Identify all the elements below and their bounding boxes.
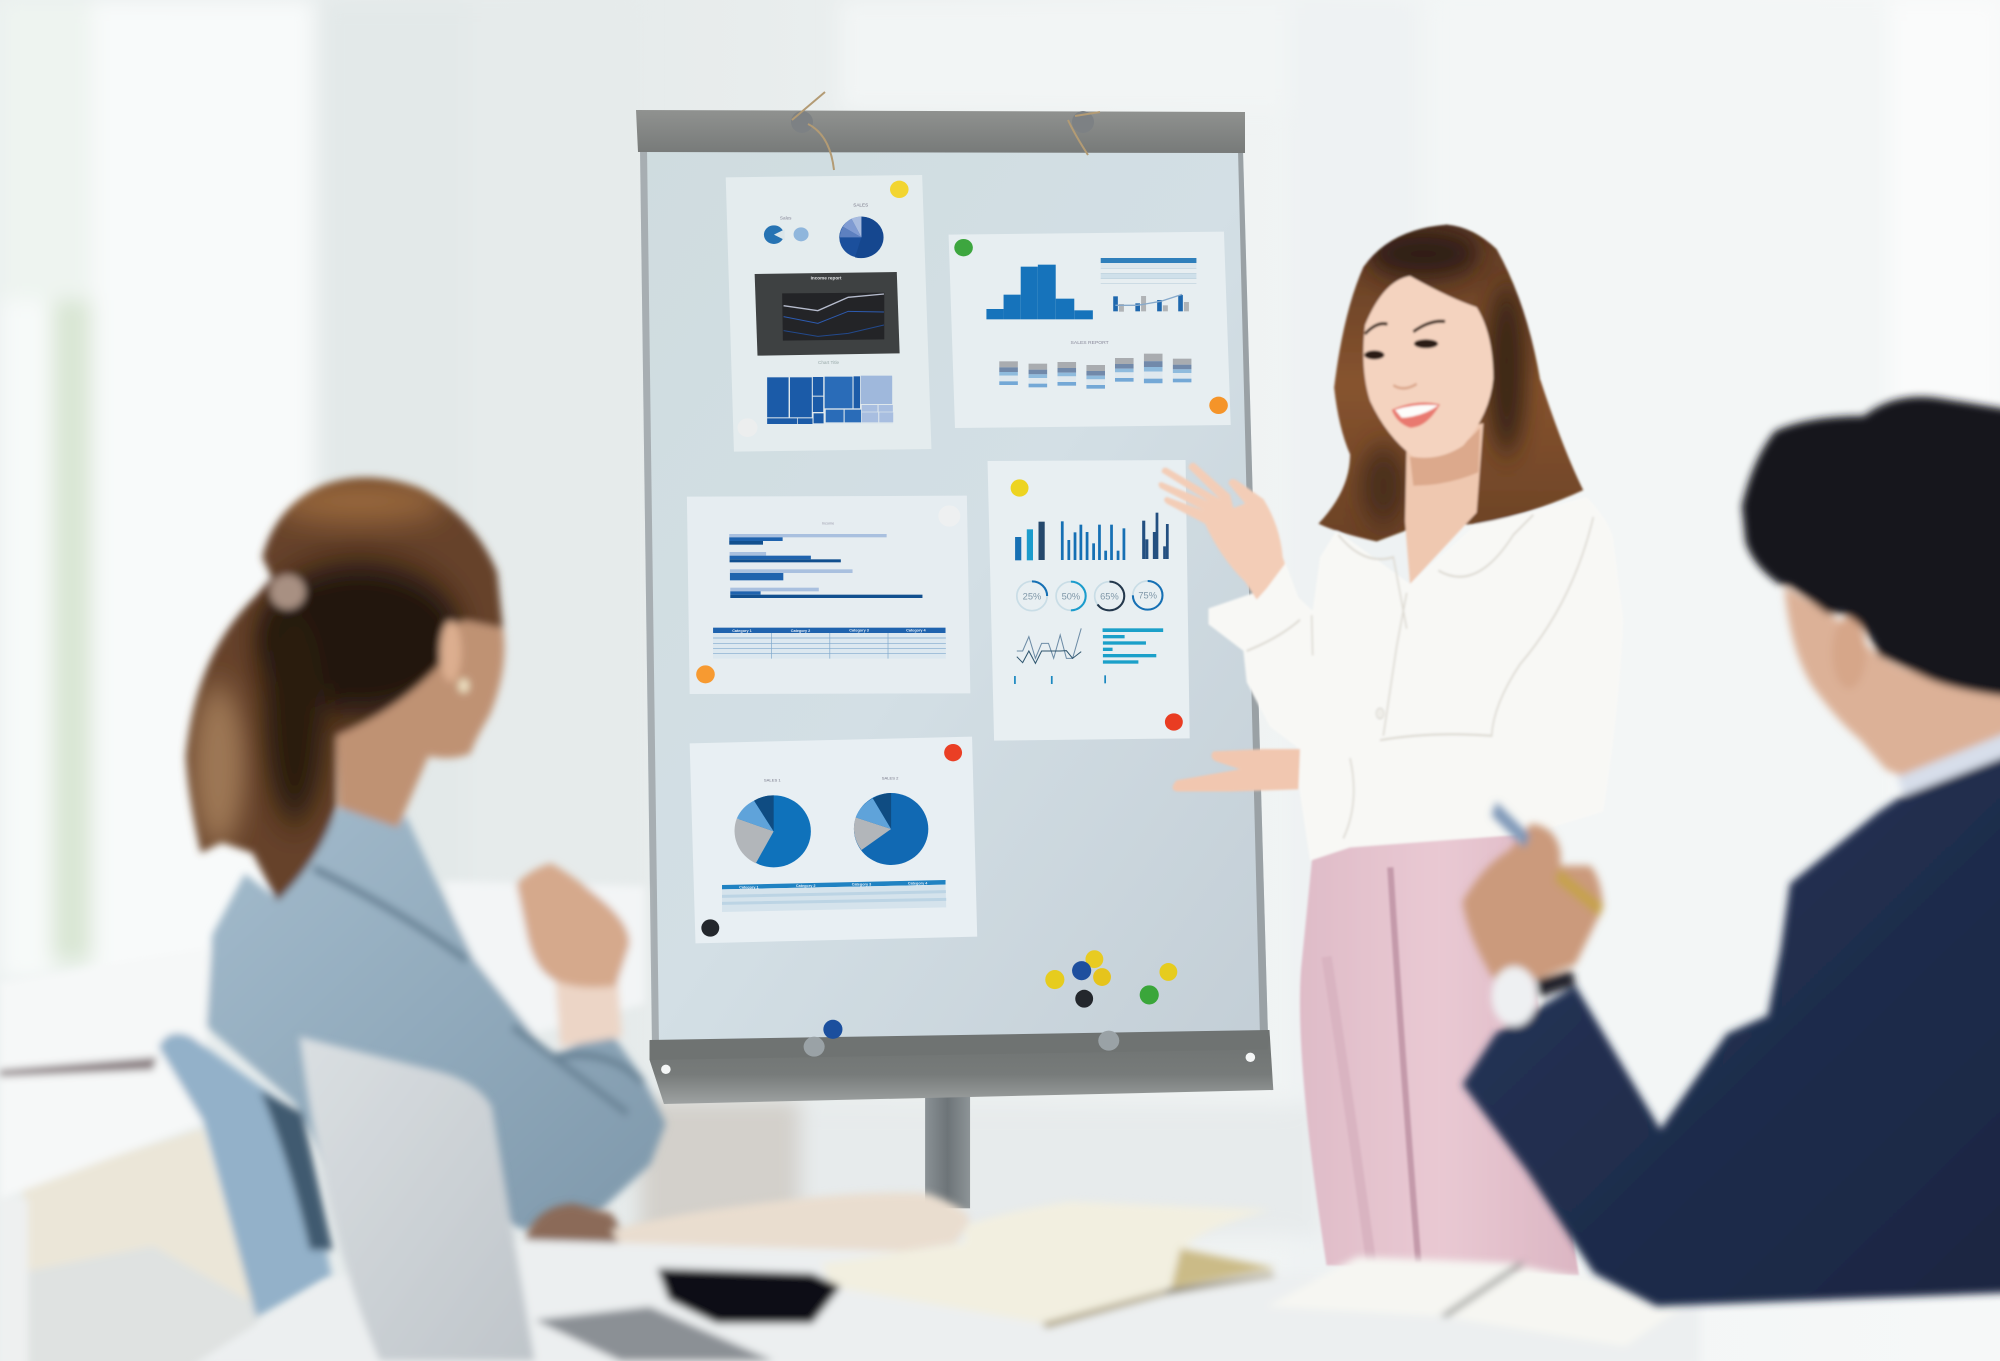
smile bbox=[1392, 402, 1440, 428]
hair bbox=[1742, 397, 2000, 701]
presenter bbox=[1159, 225, 1623, 1276]
pie chart: sales 2: SALES 2 bbox=[882, 775, 899, 780]
dark crown shading bbox=[1367, 229, 1480, 278]
paper: dashboard bbox=[988, 460, 1190, 741]
face and neck bbox=[1784, 587, 2000, 776]
income report chart: Income report bbox=[811, 275, 842, 280]
nose shadow bbox=[1393, 384, 1417, 388]
blouse folds bbox=[1247, 515, 1593, 838]
board charts, upper section bbox=[726, 175, 1231, 452]
table bbox=[1101, 258, 1196, 284]
magnet: orange bbox=[696, 665, 715, 683]
stacked bars bbox=[999, 354, 1191, 389]
upper body bbox=[1159, 225, 1623, 861]
tray holes bbox=[661, 1053, 1255, 1074]
data table bbox=[722, 880, 946, 912]
face bbox=[1363, 276, 1493, 458]
progress ring: 25% bbox=[1017, 581, 1047, 611]
magnet cluster bbox=[823, 950, 1177, 1039]
paper: horizontal bars and table bbox=[687, 496, 970, 694]
chart title: Chart Title bbox=[818, 360, 840, 365]
open book bbox=[822, 1202, 1276, 1328]
pole bbox=[925, 1095, 970, 1208]
treemap bbox=[767, 376, 893, 424]
paper: horizontal bars and table: Income bbox=[822, 522, 834, 526]
small pie charts bbox=[764, 215, 809, 244]
progress ring: 50% bbox=[1056, 582, 1086, 610]
flip board bbox=[636, 92, 1273, 1208]
sales report title: SALES REPORT bbox=[1071, 340, 1109, 346]
hair and ponytail bbox=[185, 477, 503, 902]
paper: two pie charts and table bbox=[690, 737, 977, 943]
man on right bbox=[1463, 397, 2000, 1306]
bottom tray bbox=[650, 1030, 1273, 1104]
blouse button bbox=[1376, 708, 1384, 719]
beige trousers bbox=[611, 1193, 970, 1257]
ear bbox=[1832, 617, 1866, 689]
data table: Category 2 bbox=[796, 884, 815, 888]
sales pie chart bbox=[839, 202, 884, 258]
dark hair shading bbox=[256, 562, 463, 715]
hand bbox=[517, 863, 630, 987]
raised hand bbox=[1159, 463, 1285, 600]
collar bbox=[1897, 698, 2000, 800]
tray knobs bbox=[804, 1031, 1119, 1057]
progress ring: 65%: 65% bbox=[1100, 592, 1119, 602]
hair tie bbox=[270, 574, 305, 609]
forearm bbox=[555, 976, 622, 1047]
progress ring: 75%: 75% bbox=[1138, 591, 1157, 601]
legend ticks bbox=[1014, 675, 1106, 684]
board frame edge bbox=[640, 148, 659, 1046]
data table bbox=[713, 628, 946, 659]
notebook bbox=[1267, 1257, 1692, 1347]
data table: Category 3 bbox=[852, 883, 871, 887]
floor corner bbox=[0, 1246, 260, 1361]
blouse bbox=[1208, 497, 1623, 861]
pie chart: sales 1: SALES 1 bbox=[764, 777, 781, 782]
chin shadow bbox=[1410, 428, 1480, 486]
neck bbox=[1405, 423, 1483, 584]
shirt bbox=[207, 805, 666, 1231]
hair bbox=[1318, 225, 1583, 542]
income report chart bbox=[755, 272, 900, 356]
eyebrows bbox=[1365, 321, 1445, 334]
black pouch bbox=[657, 1268, 841, 1323]
board surface bbox=[640, 148, 1268, 1046]
hand bbox=[1463, 824, 1603, 980]
ponytail highlights bbox=[191, 685, 245, 848]
pen bbox=[1494, 809, 1527, 842]
data table: Category 2 bbox=[791, 629, 810, 633]
line chart bbox=[1017, 628, 1081, 663]
magnet: white bbox=[737, 418, 757, 437]
sleeve shading bbox=[314, 868, 643, 1113]
magnet: green bbox=[954, 239, 973, 256]
board charts, lower section bbox=[687, 460, 1190, 943]
data table: Category 1 bbox=[732, 629, 752, 633]
data table: Category 4 bbox=[906, 628, 927, 632]
dark lower shading bbox=[1360, 446, 1407, 526]
small pie charts: Sales bbox=[780, 215, 792, 220]
desk behind bbox=[444, 881, 645, 1039]
paper: pies, income report and treemap bbox=[726, 175, 931, 452]
pie chart: sales 1 bbox=[735, 777, 811, 867]
watch strap bbox=[1537, 971, 1575, 997]
sales pie chart: SALES bbox=[853, 202, 868, 207]
chair bbox=[159, 1033, 332, 1317]
dark side shading bbox=[1487, 285, 1527, 454]
ear bbox=[440, 621, 461, 682]
magnet: orange bbox=[1209, 397, 1228, 414]
horizontal bar chart bbox=[729, 534, 922, 598]
dark ponytail shading bbox=[264, 608, 325, 822]
magnet: yellow bbox=[890, 181, 909, 198]
clips and twine bbox=[791, 92, 1100, 170]
lighter crown bbox=[272, 481, 448, 521]
lap skin bbox=[525, 1203, 630, 1243]
data table: Category 4 bbox=[908, 881, 928, 885]
chair shadow bbox=[260, 1090, 333, 1250]
histogram bbox=[986, 265, 1093, 319]
table leg bbox=[0, 1199, 28, 1361]
combo chart bbox=[1113, 294, 1189, 312]
lower hand bbox=[1172, 749, 1300, 792]
magnet: red lower bbox=[944, 744, 962, 761]
eyes bbox=[1364, 339, 1438, 359]
column charts bbox=[1015, 513, 1169, 560]
foreground desk and items bbox=[190, 1037, 1700, 1361]
progress ring: 50%: 50% bbox=[1062, 592, 1080, 602]
progress ring: 65% bbox=[1095, 582, 1124, 610]
tablet bbox=[535, 1307, 774, 1361]
woman on left bbox=[0, 477, 666, 1361]
horizontal bars bbox=[1103, 628, 1163, 664]
watch bbox=[1491, 966, 1537, 1026]
magnet: white bbox=[938, 505, 960, 527]
magnet: black bbox=[701, 919, 719, 937]
curtain below left desk bbox=[23, 1129, 260, 1328]
progress ring: 75% bbox=[1133, 581, 1162, 610]
magnet: yellow bbox=[1011, 479, 1029, 497]
earring bbox=[458, 679, 469, 693]
laptop bbox=[299, 1037, 535, 1361]
paper: histogram and sales report bbox=[949, 232, 1231, 428]
data table: Category 1 bbox=[739, 885, 759, 889]
jacket bbox=[1463, 740, 2000, 1306]
data table: Category 3 bbox=[849, 629, 869, 633]
pie chart: sales 2 bbox=[854, 775, 928, 865]
magnet: red upper bbox=[1165, 713, 1183, 731]
desk surface bbox=[190, 1240, 1700, 1361]
skin: face and neck bbox=[337, 621, 504, 828]
top rail bbox=[636, 110, 1245, 153]
item on desk bbox=[0, 1057, 157, 1077]
trousers bbox=[1300, 832, 1579, 1276]
desk on left bbox=[0, 947, 210, 1199]
progress ring: 25%: 25% bbox=[1023, 592, 1041, 602]
